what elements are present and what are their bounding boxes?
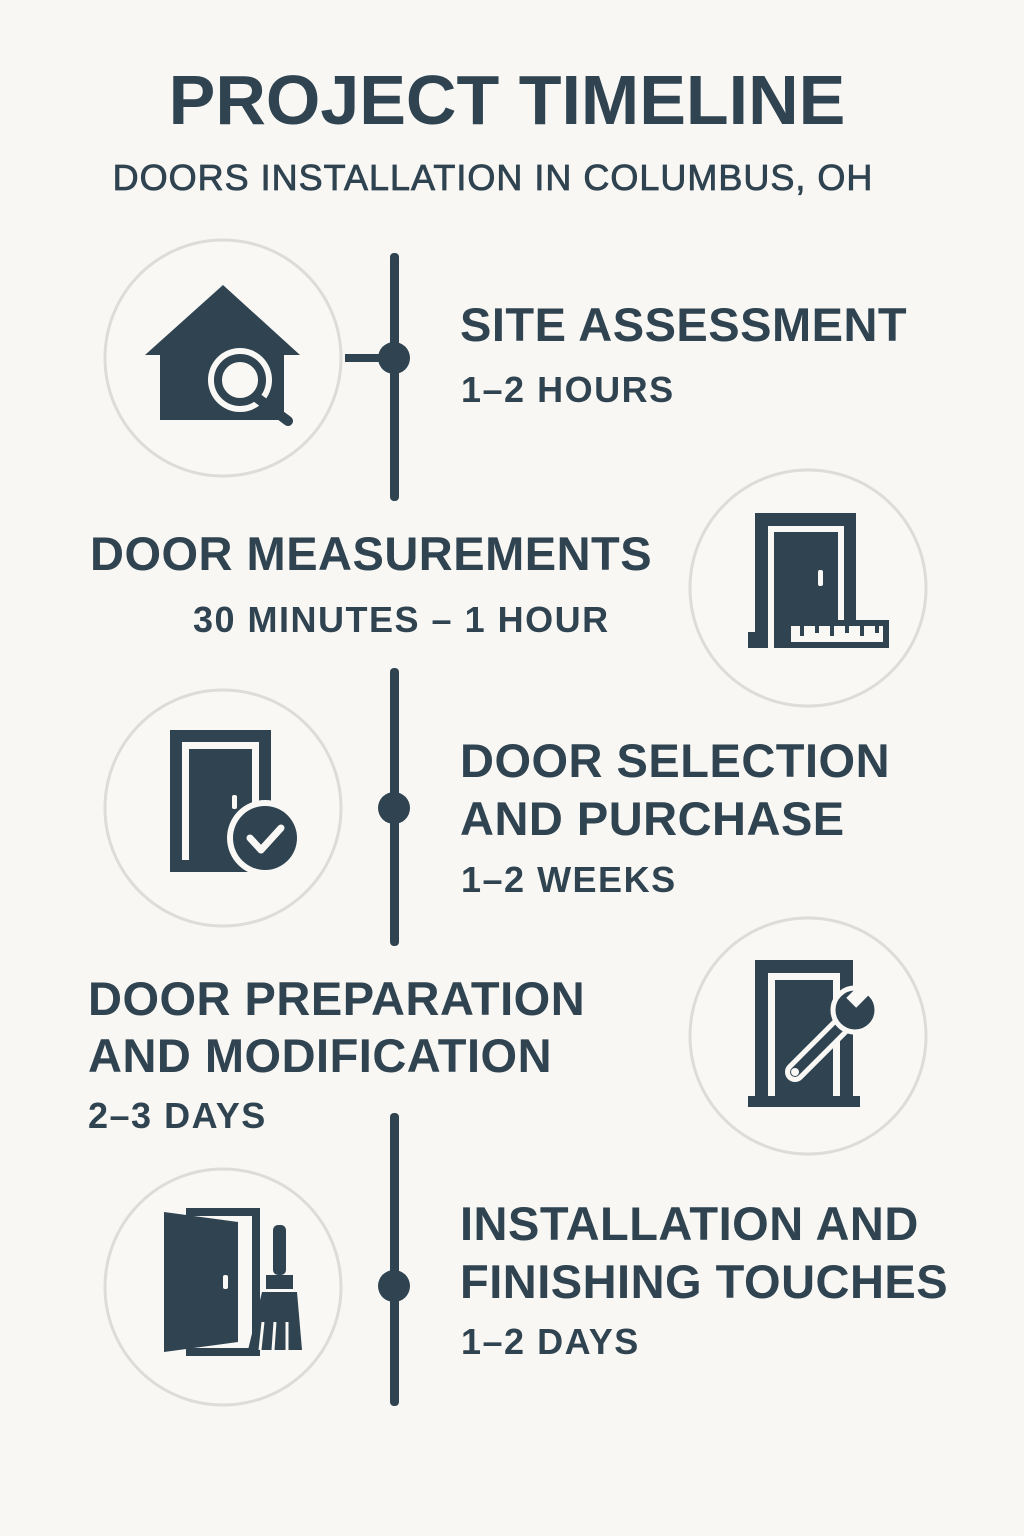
step 2 text [90,527,652,640]
step 1 text: 1–2 HOURS [461,369,675,410]
step 5 text: 1–2 DAYS [461,1321,640,1362]
icon: door with checkmark [105,690,341,926]
step 4 text: DOOR PREPARATION [88,972,585,1025]
timeline: segment 2 [378,668,410,946]
icon: door with ruler [690,470,926,706]
step 2 text: 30 MINUTES – 1 HOUR [193,599,610,640]
step 1 text [460,298,907,410]
icon: door with wrench [690,918,926,1154]
timeline: segment 1 [345,253,410,501]
icon: open door with brush [105,1169,341,1405]
icon: house with magnifier [105,240,341,476]
step 4 text: AND MODIFICATION [88,1029,552,1082]
step 3 text [460,734,890,900]
step 2 text: DOOR MEASUREMENTS [90,527,652,580]
step 5 text: FINISHING TOUCHES [460,1255,948,1308]
step 1 text: SITE ASSESSMENT [460,298,907,351]
timeline: segment 3 [378,1113,410,1406]
step 3 text: AND PURCHASE [460,792,845,845]
step 4 text: 2–3 DAYS [88,1095,267,1136]
title: PROJECT TIMELINE [169,61,845,139]
step 5 text: INSTALLATION AND [460,1197,919,1250]
step 4 text [88,972,585,1136]
step 3 text: DOOR SELECTION [460,734,890,787]
subtitle: DOORS INSTALLATION IN COLUMBUS, OH [113,157,873,198]
step 5 text [460,1197,948,1362]
step 3 text: 1–2 WEEKS [461,859,677,900]
